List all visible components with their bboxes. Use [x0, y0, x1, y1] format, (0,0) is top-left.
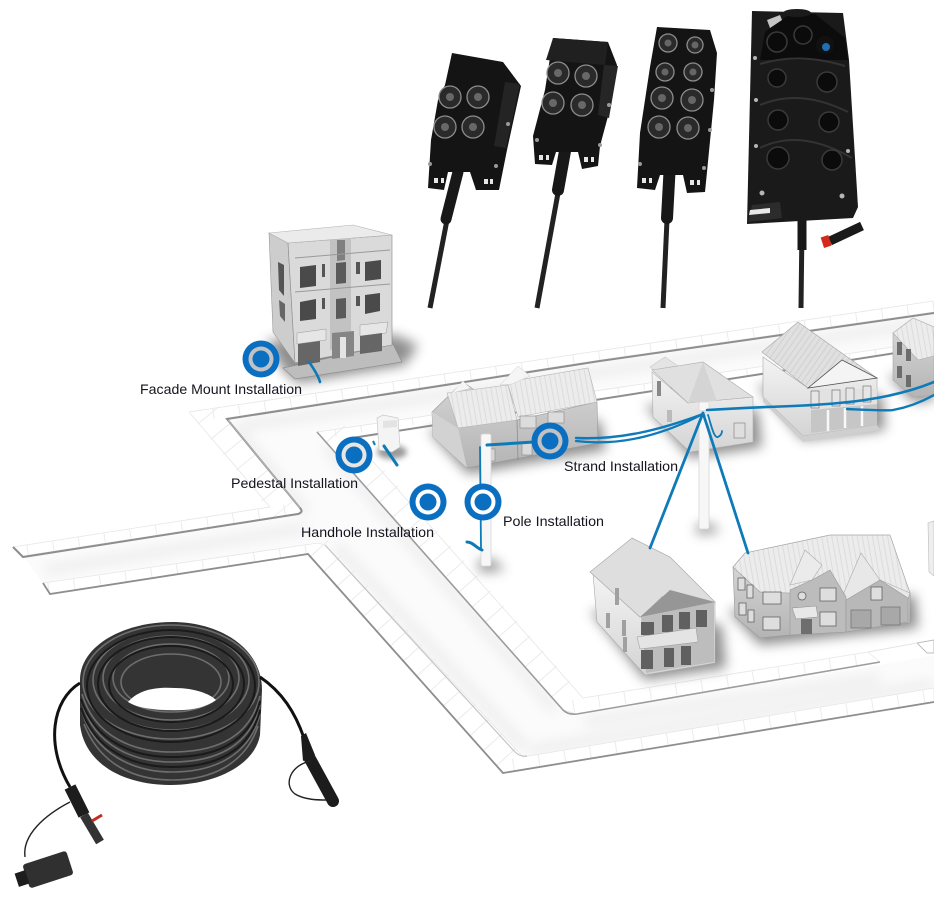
marker: facade mount [242, 340, 280, 378]
building: porch house [762, 322, 880, 442]
label: strand: Strand Installation [564, 458, 678, 474]
marker: strand [532, 422, 568, 460]
cable: facade drop [309, 362, 320, 382]
left cable and connector [55, 683, 80, 787]
product: four-port terminal [428, 53, 521, 308]
coil body [80, 622, 262, 785]
blue port [816, 36, 834, 54]
cable: strand span lower [576, 414, 703, 442]
product: large twelve-port terminal [747, 9, 862, 308]
coil center hole [128, 688, 216, 710]
building: hip-roof house [650, 357, 753, 452]
building: upper right partial house [893, 318, 934, 397]
dust cap [13, 851, 74, 892]
red connector [821, 226, 862, 248]
sidewalk: lower right stub [868, 640, 934, 653]
sidewalks and streets [13, 301, 934, 773]
ground shadows under buildings [266, 335, 934, 680]
label: pedestal: Pedestal Installation [231, 475, 358, 491]
cable: strand span upper [576, 414, 703, 438]
building: lower large gabled house [733, 535, 910, 638]
right cable and connector [260, 677, 304, 738]
road surface [23, 312, 934, 757]
cable: span to right upper [707, 382, 934, 410]
label: handhole: Handhole Installation [301, 524, 434, 540]
cable: handhole tail [467, 542, 482, 550]
building: facade mount [269, 225, 402, 379]
marker: pole [464, 484, 502, 520]
marker: pedestal [336, 436, 372, 474]
marker: handhole [410, 484, 446, 520]
label: pole: Pole Installation [503, 513, 604, 529]
cable: drop to large house [703, 413, 748, 553]
cable: drop to colonial house [650, 413, 703, 548]
cable: pedestal drop [384, 446, 397, 465]
fiber cables [309, 362, 934, 553]
cable: slack loop at pole [708, 415, 722, 437]
sidewalk: lower left and bottom edge [43, 543, 934, 773]
sidewalk: inner block [317, 341, 934, 714]
pole: left utility pole [481, 434, 491, 566]
cable: span to right lower [847, 395, 934, 410]
product: compact four-port terminal [533, 38, 618, 308]
product: coiled drop cable [13, 622, 333, 892]
label: facade mount: Facade Mount Installation [140, 381, 302, 397]
product: eight-port terminal [637, 27, 717, 308]
cable: vertical pole riser [480, 447, 481, 549]
building: lower left colonial house [590, 538, 715, 675]
sidewalk: upper left block [13, 301, 934, 557]
pole: right utility pole [694, 402, 709, 529]
pedestal enclosure [373, 415, 407, 459]
cable: strand from pole to house [487, 441, 550, 445]
road surface shading [45, 322, 934, 750]
building: front-left ranch house [432, 366, 598, 468]
building: far right partial house [928, 521, 934, 576]
